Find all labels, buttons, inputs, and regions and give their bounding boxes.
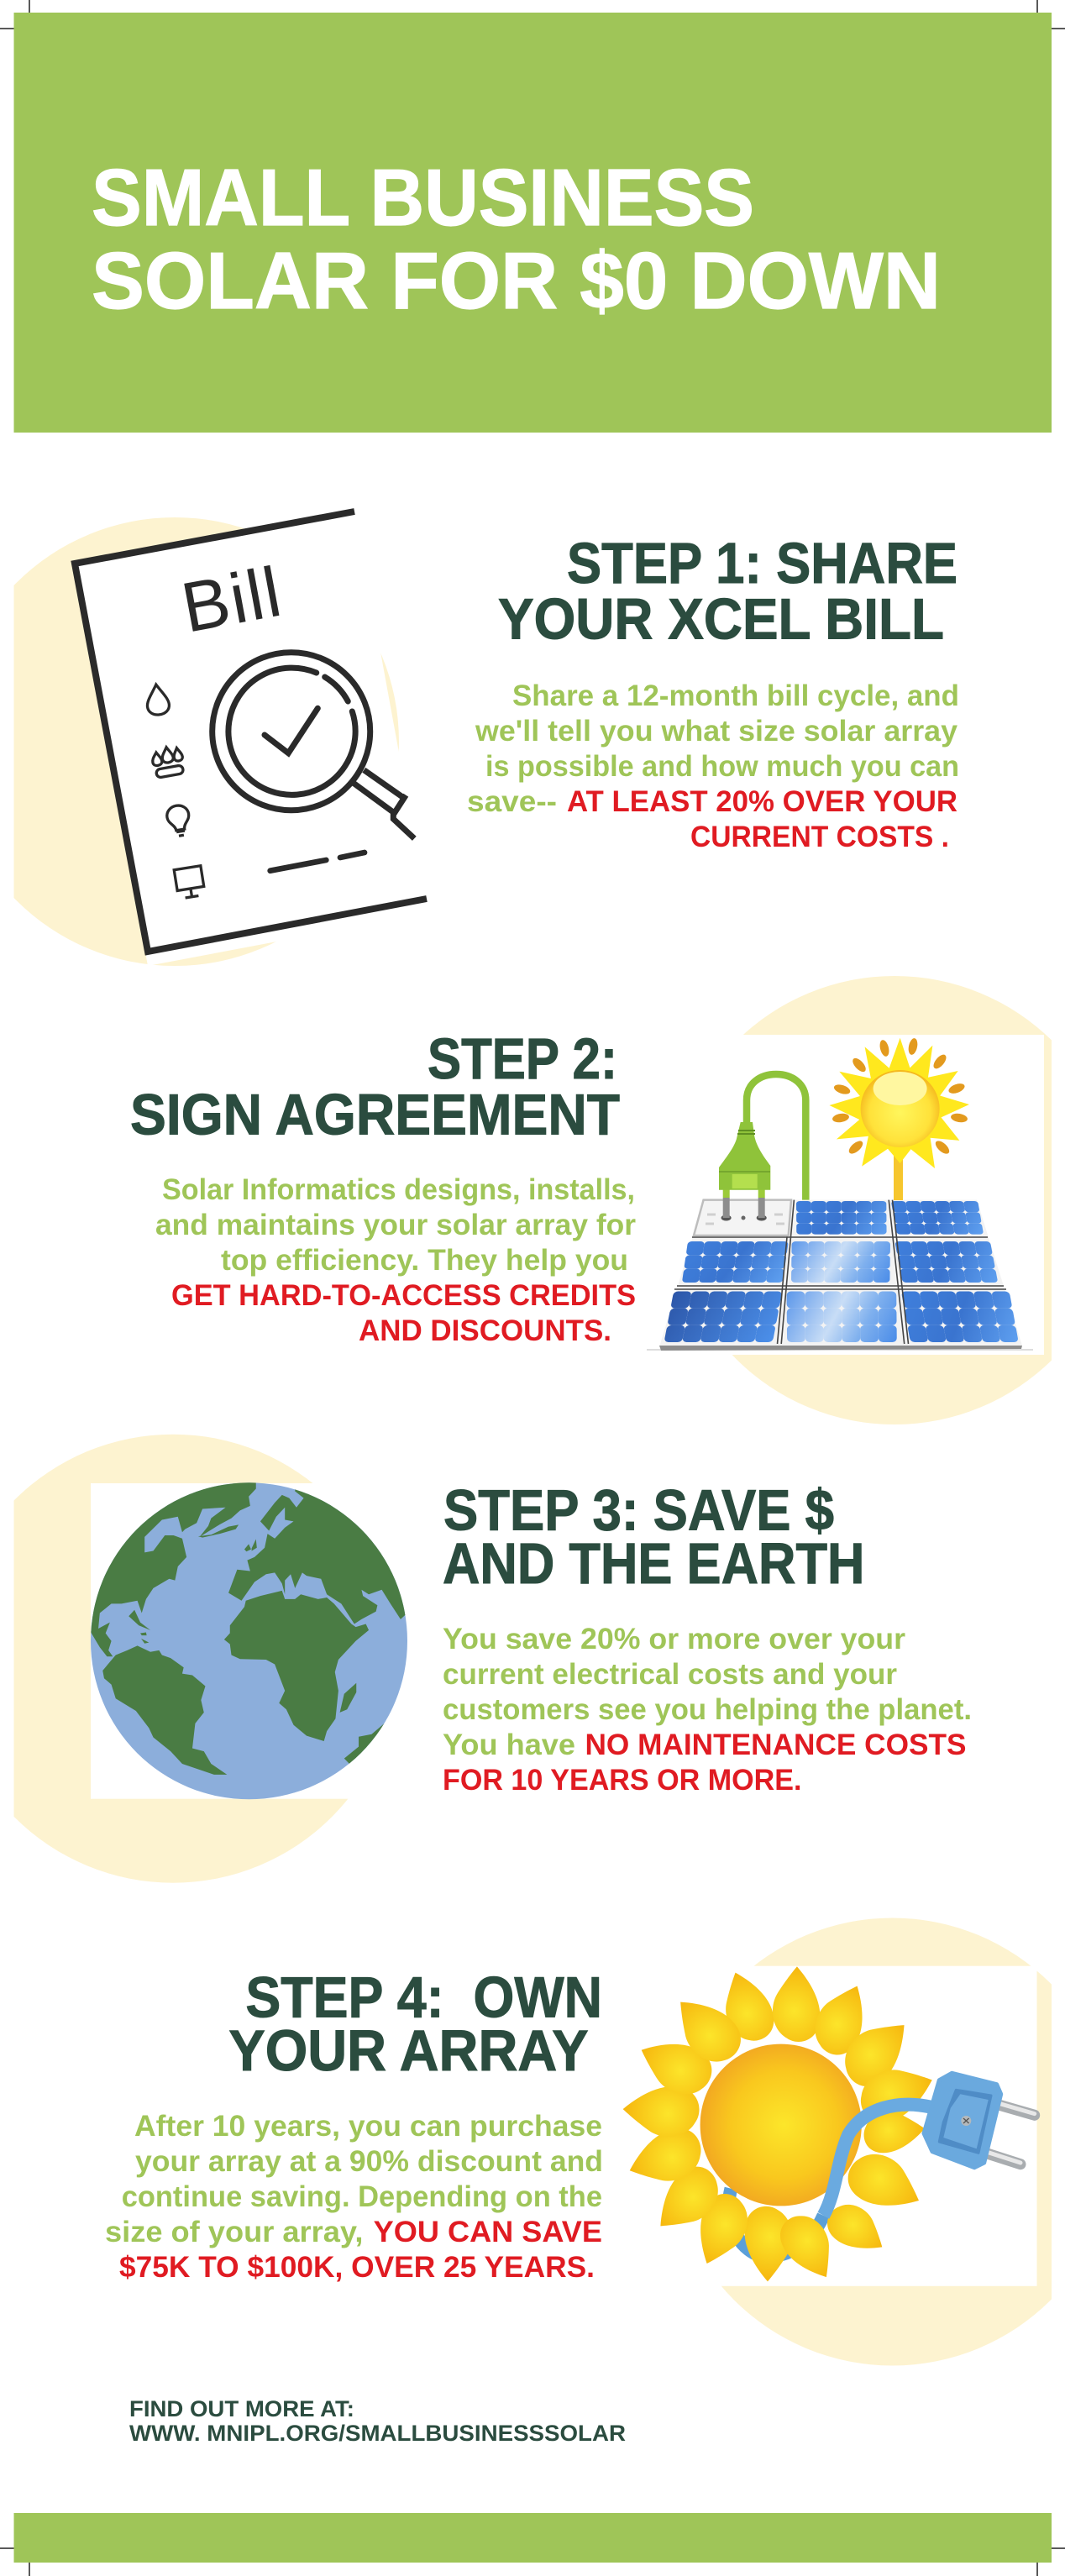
icon: blue plug <box>924 2073 1035 2168</box>
heading: step 3 <box>443 1478 865 1596</box>
socket <box>694 1200 791 1236</box>
icon: power cord <box>747 1074 805 1200</box>
text block: step 2: GET HARD-TO-ACCESS CREDITS <box>171 1279 636 1312</box>
footer bar <box>13 2513 1052 2563</box>
text block: step 4: size of your array, <box>105 2216 363 2248</box>
footer link text: WWW. MNIPL.ORG/SMALLBUSINESSSOLAR <box>129 2421 626 2446</box>
text block: step 4: your array at a 90% discount and <box>135 2145 603 2178</box>
heading: step 4 <box>228 1965 602 2083</box>
heading: step 3: AND THE EARTH <box>443 1531 865 1596</box>
footer link text <box>129 2396 626 2446</box>
footer link text: FIND OUT MORE AT: <box>129 2396 354 2421</box>
text block: step 3: You have <box>443 1729 575 1761</box>
text block: step 2: AND DISCOUNTS. <box>359 1314 611 1347</box>
heading: step 4: YOUR ARRAY <box>228 2018 589 2083</box>
text block: step 3: current electrical costs and your <box>443 1658 897 1691</box>
text block: step 1 <box>467 679 959 853</box>
text block: step 1: CURRENT COSTS . <box>690 821 949 853</box>
icon: magnifier with check mark <box>212 653 414 838</box>
icon: light bulb <box>165 804 192 837</box>
signature dashes <box>270 853 365 871</box>
panel: step 3 illustration, globe <box>0 1435 412 1883</box>
text block: step 1: is possible and how much you can <box>485 750 959 783</box>
icon: water drop <box>145 684 171 716</box>
text block: step 2: Solar Informatics designs, installs, <box>162 1173 635 1206</box>
text block: step 4: continue saving. Depending on the <box>122 2180 602 2213</box>
panel shadow and base <box>647 1200 1033 1351</box>
title <box>92 153 941 326</box>
text block: step 1: save-- <box>467 785 557 818</box>
text block: step 1: we'll tell you what size solar array <box>475 715 958 748</box>
text block: step 1: AT LEAST 20% OVER YOUR <box>567 785 957 818</box>
text block: step 4 <box>105 2110 603 2284</box>
text block: step 3 <box>443 1623 972 1797</box>
panel: step 1 illustration, bill under magnifier <box>0 510 428 966</box>
solar cells <box>664 1200 1019 1344</box>
bill label: Bill <box>176 552 286 648</box>
title: SMALL BUSINESS <box>92 153 754 243</box>
text block: step 2: and maintains your solar array for <box>155 1209 636 1241</box>
text block: step 4: YOU CAN SAVE <box>374 2216 602 2248</box>
text block: step 3: customers see you helping the planet. <box>443 1693 972 1726</box>
text block: step 2 <box>155 1173 636 1347</box>
heading: step 3: STEP 3: SAVE $ <box>443 1478 834 1543</box>
text block: step 4: After 10 years, you can purchase <box>134 2110 602 2143</box>
heading: step 2 <box>130 1026 620 1147</box>
panel: step 2 illustration, solar panels with plug and sun <box>640 976 1065 1424</box>
text block: step 1: Share a 12-month bill cycle, and <box>512 679 959 712</box>
text block: step 4: $75K TO $100K, OVER 25 YEARS. <box>119 2251 595 2284</box>
icon: sun with cord <box>621 1965 940 2289</box>
icon: monitor <box>174 866 205 899</box>
icon: gas flames <box>150 745 186 779</box>
title banner <box>13 13 1052 433</box>
heading: step 1: STEP 1: SHARE <box>567 531 957 595</box>
icon: globe land masses <box>87 1479 411 1775</box>
text block: step 3: NO MAINTENANCE COSTS <box>585 1729 966 1761</box>
heading: step 1: YOUR XCEL BILL <box>498 586 944 652</box>
text block: step 2: top efficiency. They help you <box>221 1244 628 1277</box>
heading: step 2: STEP 2: <box>428 1026 617 1091</box>
heading: step 2: SIGN AGREEMENT <box>130 1083 620 1147</box>
text block: step 3: FOR 10 YEARS OR MORE. <box>443 1764 801 1797</box>
panel: step 4 illustration, sun with blue plug <box>621 1918 1065 2365</box>
icon: sun on panels <box>830 1037 969 1200</box>
heading: step 1 <box>498 531 957 652</box>
title: SOLAR FOR $0 DOWN <box>92 236 941 326</box>
text block: step 3: You save 20% or more over your <box>443 1623 905 1655</box>
icon: green plug <box>719 1122 770 1218</box>
heading: step 4: STEP 4: OWN <box>245 1965 602 2030</box>
